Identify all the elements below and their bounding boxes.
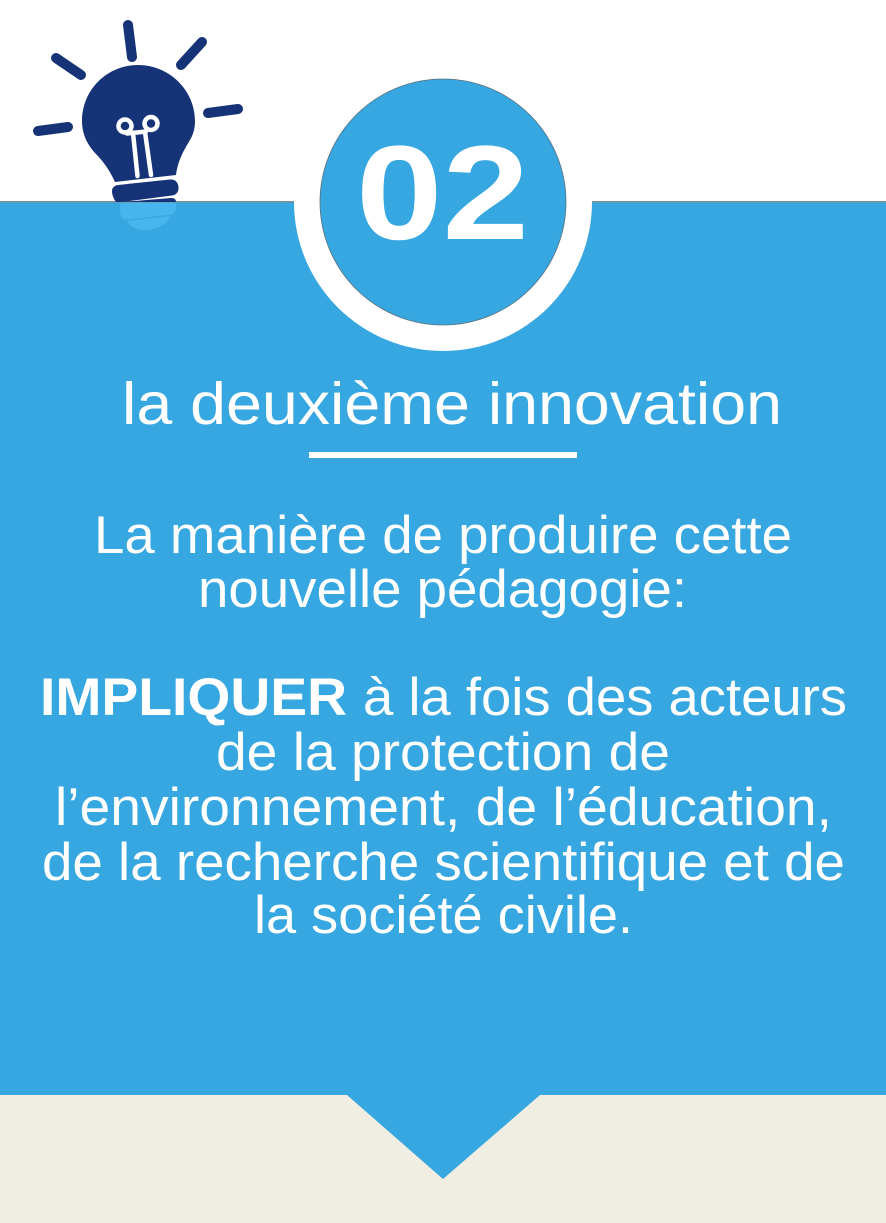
- text block: impliquer paragraph: de la protection de: [216, 723, 670, 782]
- text block: intro: [94, 506, 792, 619]
- icon: bulb tip: [127, 216, 170, 230]
- text block: intro: La manière de produire cette: [94, 506, 792, 565]
- arrow: downward pointer below panel: [347, 1095, 540, 1179]
- icon: light bulb: [38, 25, 238, 230]
- icon: bulb collar: [112, 179, 179, 202]
- panel top edge line: [0, 201, 886, 202]
- icon: bulb rays: [38, 25, 238, 131]
- badge blue disc: [320, 79, 566, 325]
- text block: impliquer paragraph: de la recherche scientifique et de: [42, 833, 845, 892]
- badge number: 02: [356, 119, 529, 268]
- panel: blue main panel: [0, 202, 886, 1095]
- icon: bulb glass: [82, 65, 195, 182]
- icon: bulb base, navy part: [122, 198, 176, 202]
- panel: white header background: [0, 0, 886, 202]
- badge white ring: [294, 53, 592, 351]
- text block: impliquer paragraph: à la fois des acteurs: [363, 668, 847, 727]
- icon: bulb base, light part: [120, 202, 176, 220]
- heading: la deuxième innovation: la deuxième innovation: [122, 371, 782, 437]
- text block: impliquer paragraph: IMPLIQUER: [40, 668, 347, 727]
- heading underline: [309, 452, 577, 458]
- panel: cream footer band: [0, 1095, 886, 1223]
- text block: impliquer paragraph: l’environnement, de l’éducation,: [55, 778, 832, 837]
- badge mask above panel: [294, 150, 592, 201]
- text block: impliquer paragraph: [40, 668, 847, 945]
- text block: impliquer paragraph: la société civile.: [254, 886, 633, 945]
- number badge: [294, 53, 592, 351]
- icon: bulb filament: [118, 117, 158, 176]
- text block: intro: nouvelle pédagogie:: [198, 560, 687, 619]
